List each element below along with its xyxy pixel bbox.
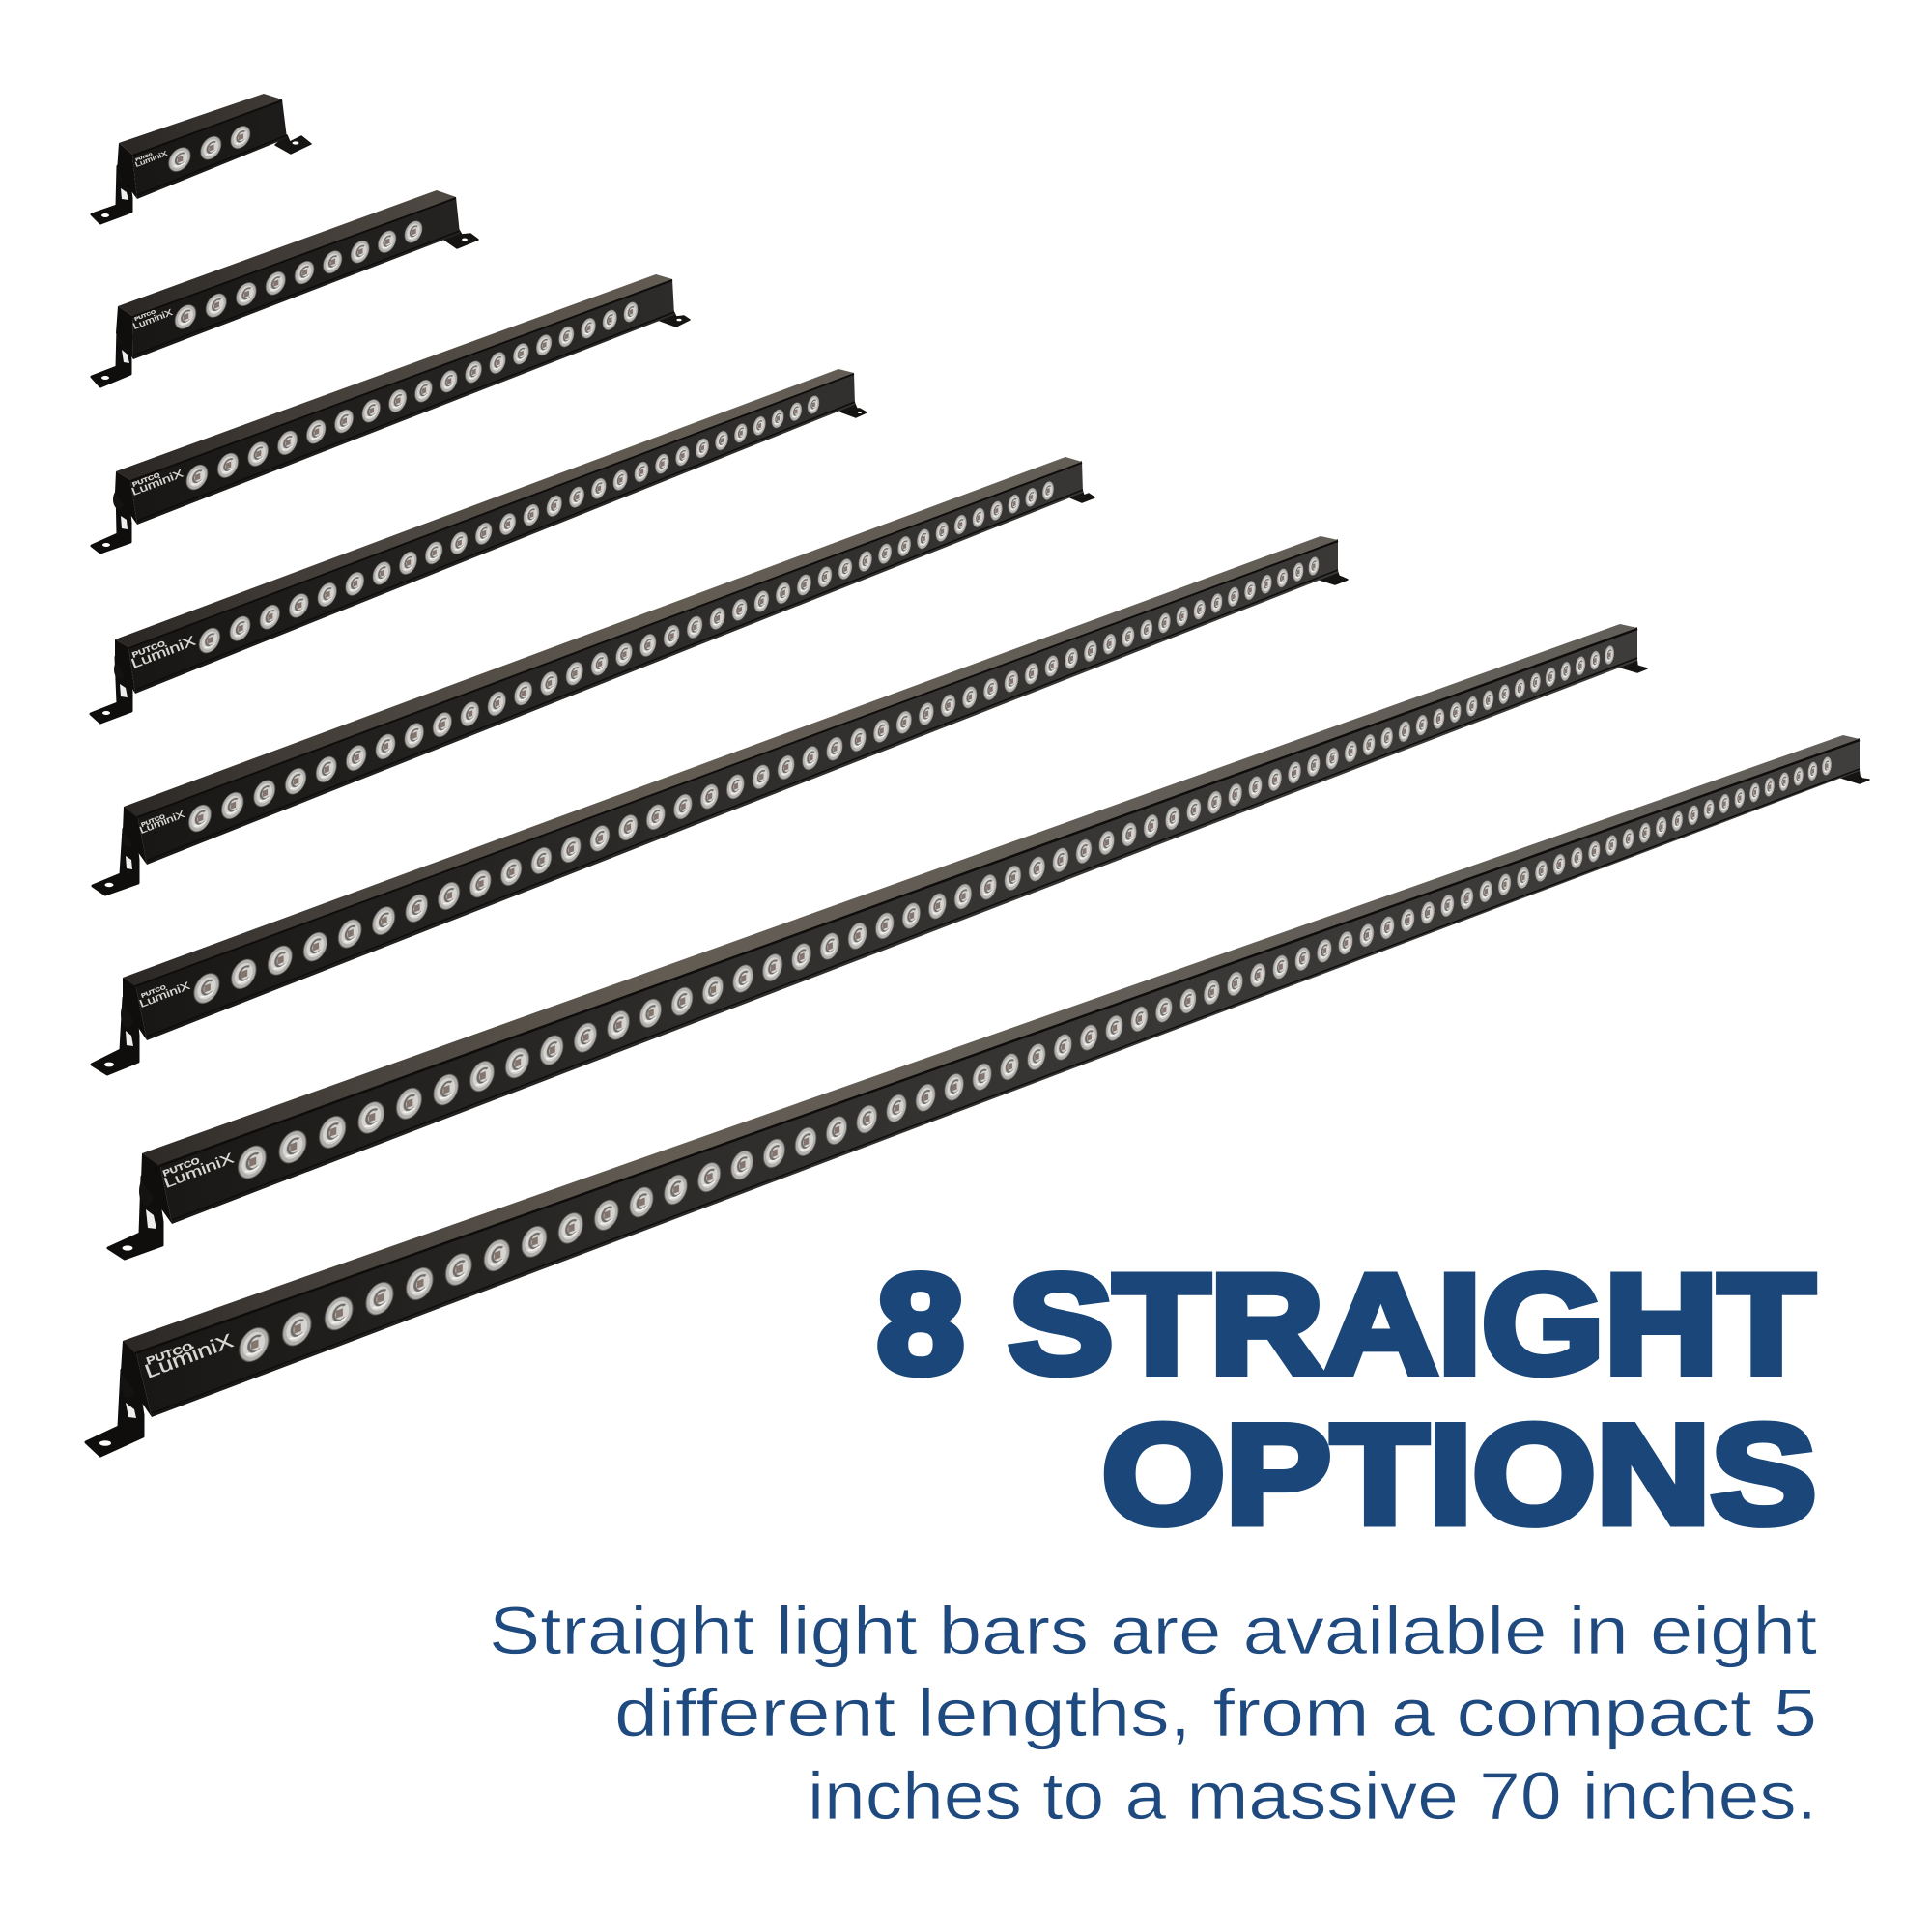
- heading: 8 STRAIGHT: [877, 1245, 1814, 1403]
- logo: [128, 632, 198, 671]
- logo: LuminiX: [138, 980, 192, 1010]
- lens row: [188, 481, 1054, 833]
- logo: [142, 1330, 237, 1383]
- lens row: [238, 645, 1614, 1179]
- lens row: [193, 556, 1320, 1005]
- logo: PUTCO: [161, 1155, 201, 1179]
- light bar 7: 60 inch, 57 lenses: [106, 624, 1648, 1260]
- right mounting foot: [840, 402, 867, 417]
- bar body: [115, 274, 674, 525]
- logo: [131, 307, 174, 331]
- bar body: [123, 457, 1083, 865]
- logo: LuminiX: [161, 1151, 236, 1192]
- lens row: [199, 395, 819, 653]
- right mounting foot: [658, 311, 690, 327]
- lens row: [174, 220, 423, 329]
- right mounting foot: [1618, 658, 1647, 672]
- heading: [877, 1245, 1818, 1553]
- logo: LuminiX: [142, 1330, 237, 1383]
- light bar 1: 5 inch, 3 lenses: [90, 94, 312, 224]
- bar body: [141, 624, 1637, 1224]
- left mounting bracket: [93, 826, 138, 895]
- logo: LuminiX: [134, 151, 169, 169]
- right mounting foot: [1070, 490, 1094, 502]
- left mounting bracket: [92, 163, 131, 223]
- logo: PUTCO: [141, 984, 167, 1000]
- light bar 8: 70 inch, 65 lenses: [84, 735, 1870, 1457]
- logo: [138, 980, 192, 1010]
- left mounting bracket: [108, 1174, 162, 1259]
- right mounting foot: [275, 135, 311, 154]
- left mounting bracket: [91, 655, 131, 723]
- logo: PUTCO: [130, 639, 166, 660]
- logo: PUTCO: [134, 309, 156, 323]
- left mounting bracket: [92, 325, 130, 386]
- logo: LuminiX: [130, 468, 185, 498]
- description text: different lengths, from a compact 5: [614, 1675, 1817, 1750]
- lens row: [168, 126, 251, 172]
- lens row: [185, 301, 638, 491]
- light bar 4: 30 inch, 27 lenses: [89, 369, 867, 724]
- logo: [161, 1151, 236, 1192]
- description text: [489, 1593, 1817, 1833]
- right mounting foot: [1841, 768, 1869, 783]
- bar body: [117, 94, 287, 199]
- bar body: [121, 735, 1860, 1417]
- logo: [134, 151, 169, 169]
- logo: LuminiX: [128, 632, 198, 671]
- logo: PUTCO: [135, 152, 153, 162]
- left mounting bracket: [92, 486, 130, 553]
- light bar 2: 10 inch, 9 lenses: [90, 190, 479, 388]
- logo: PUTCO: [145, 1341, 195, 1368]
- light bar 5: 40 inch, 37 lenses: [91, 457, 1095, 896]
- logo: PUTCO: [131, 472, 161, 489]
- left mounting bracket: [92, 996, 138, 1074]
- heading: OPTIONS: [1101, 1395, 1816, 1553]
- light bar 3: 20 inch, 18 lenses: [90, 274, 691, 554]
- lens row: [239, 756, 1832, 1362]
- light bar 6: 50 inch, 47 lenses: [90, 536, 1349, 1076]
- left mounting bracket: [86, 1366, 143, 1456]
- logo: LuminiX: [131, 307, 174, 331]
- bar body: [123, 536, 1338, 1040]
- logo: PUTCO: [141, 814, 166, 829]
- bar body: [116, 190, 460, 359]
- bar body: [115, 369, 855, 694]
- description text: inches to a massive 70 inches.: [808, 1758, 1817, 1833]
- right mounting foot: [1320, 570, 1348, 584]
- logo: LuminiX: [138, 810, 186, 837]
- logo: [130, 468, 185, 498]
- description text: Straight light bars are available in eight: [489, 1593, 1817, 1668]
- logo: [138, 810, 186, 837]
- right mounting foot: [444, 230, 478, 248]
